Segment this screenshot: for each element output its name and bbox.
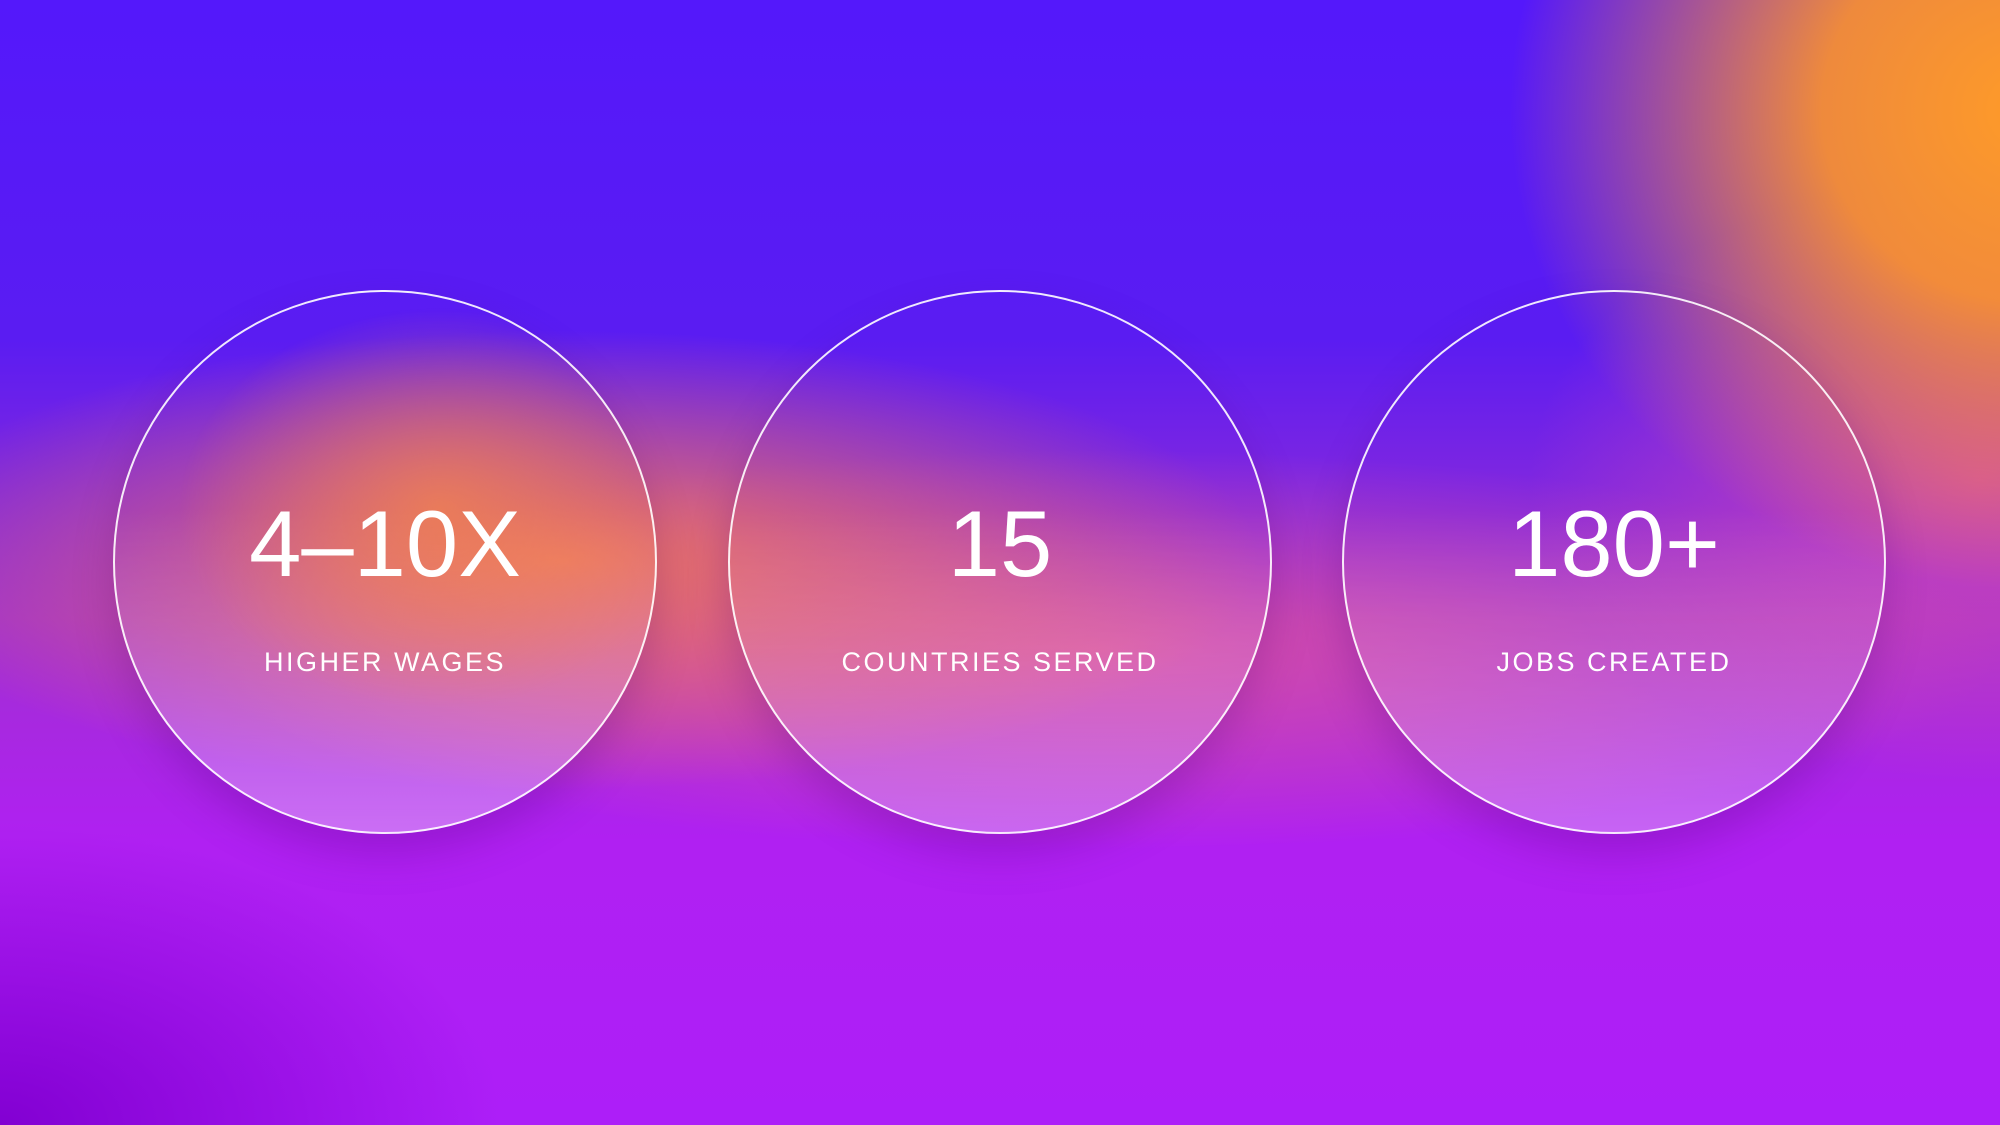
stat number: 180+ xyxy=(1508,491,1720,596)
stat label: COUNTRIES SERVED xyxy=(841,647,1159,677)
circle: jobs created xyxy=(1342,290,1886,834)
stat label: JOBS CREATED xyxy=(1496,647,1732,677)
circle: higher wages xyxy=(113,290,657,834)
stat label: HIGHER WAGES xyxy=(264,647,506,677)
circle: countries served xyxy=(728,290,1272,834)
stat number: 15 xyxy=(948,491,1052,596)
stat number: 4–10X xyxy=(249,491,521,596)
